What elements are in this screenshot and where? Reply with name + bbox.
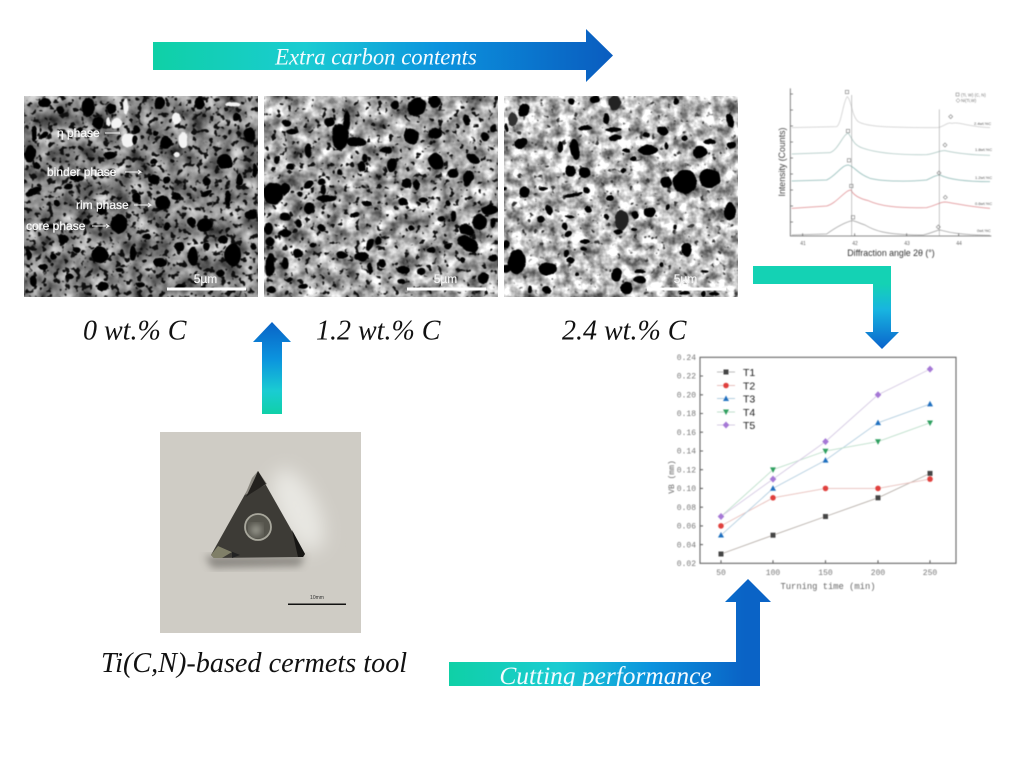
- x-axis tick labels: 250: [923, 569, 937, 578]
- chart legend: [717, 367, 755, 432]
- y-axis tick labels: 0.02: [677, 560, 696, 569]
- y-axis title: VB (mm): [668, 460, 677, 494]
- chart: XRD patterns: [777, 88, 992, 258]
- insert body: [211, 471, 305, 558]
- XRD tick labels: [800, 241, 962, 247]
- XRD peak guide lines: [852, 95, 939, 236]
- XRD curve 1.8 wt.% C: [792, 133, 990, 155]
- x-axis tick labels: [716, 569, 937, 578]
- x-axis title: Turning time (min): [780, 582, 876, 592]
- scale bar 5 µm: [407, 272, 486, 290]
- XRD axis title: intensity: Intensity (Counts): [777, 127, 787, 196]
- y-axis tick labels: 0.14: [677, 448, 696, 457]
- micrograph labels: binder phase: [47, 165, 117, 179]
- arrow: extra carbon contents: Extra carbon contents: [274, 44, 477, 70]
- XRD peak markers: [845, 90, 953, 229]
- micrograph labels: core phase: [26, 219, 86, 233]
- arrow: cutting performance: Cutting performance: [499, 662, 712, 690]
- XRD curve labels: 0.6wt.%C: [975, 201, 992, 206]
- x-axis tick labels: 150: [818, 569, 833, 578]
- scale bar 5 µm: 5µm: [434, 272, 457, 286]
- XRD curve 0.6 wt.% C: [792, 190, 990, 208]
- XRD axes frame: [790, 88, 991, 236]
- panel: micrograph 2.4 wt.% C: [502, 95, 738, 297]
- XRD curve labels: 1.2wt.%C: [975, 175, 992, 180]
- caption: 2.4 wt.% C: 2.4 wt.% C: [562, 316, 687, 346]
- chart legend: T4: [743, 407, 755, 419]
- XRD axis title: diffraction angle: Diffraction angle 2θ (°): [847, 248, 935, 258]
- chart legend: T1: [743, 367, 755, 379]
- series T1: [718, 471, 932, 556]
- x-axis tick labels: 200: [871, 569, 885, 578]
- arrow: cutting performance: [449, 579, 771, 690]
- micrograph labels: rim phase: [76, 198, 129, 212]
- insert hole: [245, 514, 271, 540]
- XRD tick labels: 43: [904, 241, 910, 247]
- XRD legend: (Ti, W) (C, N): [961, 92, 986, 98]
- XRD curve 2.4 wt.% C: [792, 97, 990, 128]
- insert shadow: [205, 556, 305, 568]
- photo scale bar 10 mm: [288, 595, 346, 605]
- series T5: [718, 366, 933, 520]
- photo scale bar 10 mm: 10mm: [310, 595, 324, 601]
- XRD tick labels: 42: [852, 241, 858, 247]
- chart frame and ticks: [700, 357, 956, 563]
- XRD curve 0 wt.% C: [792, 221, 990, 235]
- scale bar 5 µm: [647, 272, 726, 290]
- chart legend: T3: [743, 394, 755, 406]
- y-axis tick labels: 0.08: [677, 504, 696, 513]
- x-axis tick labels: 100: [766, 569, 780, 578]
- y-axis tick labels: 0.22: [677, 373, 696, 382]
- scale bar 5 µm: 5µm: [674, 272, 697, 286]
- XRD tick labels: 44: [956, 241, 962, 247]
- chart legend: T2: [743, 380, 755, 392]
- x-axis tick labels: 50: [716, 569, 726, 578]
- XRD curve labels: [974, 121, 992, 233]
- caption: 0 wt.% C: 0 wt.% C: [83, 316, 187, 346]
- y-axis tick labels: 0.06: [677, 523, 696, 532]
- caption: 1.2 wt.% C: 1.2 wt.% C: [316, 316, 441, 346]
- XRD curve labels: 2.4wt.%C: [974, 121, 991, 126]
- arrow: extra carbon contents: [153, 29, 613, 82]
- series T3: [718, 401, 933, 538]
- micrograph labels: η phase: [57, 126, 100, 140]
- caption: Ti(C,N)-based cermets tool: Ti(C,N)-based cermets tool: [101, 648, 407, 679]
- panel: micrograph 1.2 wt.% C: [263, 95, 498, 297]
- y-axis tick labels: 0.20: [677, 392, 696, 400]
- XRD curve labels: 1.8wt.%C: [975, 147, 992, 152]
- arrow: tool to micrographs: [253, 322, 291, 414]
- arrow: XRD to cutting chart: [753, 266, 899, 349]
- y-axis tick labels: 0.10: [677, 485, 696, 494]
- series T4: [721, 420, 933, 516]
- XRD legend: Ni(Ti,W): [961, 98, 977, 103]
- series T2: [718, 476, 933, 529]
- y-axis tick labels: 0.24: [677, 354, 696, 363]
- XRD curve labels: 0wt.%C: [977, 228, 991, 233]
- photo highlight: [261, 462, 335, 558]
- y-axis tick labels: 0.18: [677, 410, 696, 419]
- photo: cermet tool insert: [160, 432, 361, 633]
- chart legend: T5: [743, 420, 755, 432]
- XRD curve 1.2 wt.% C: [792, 165, 990, 182]
- chart: VB wear vs turning time: [668, 354, 956, 592]
- scale bar 5 µm: 5µm: [194, 272, 217, 286]
- scale bar 5 µm: [167, 272, 246, 290]
- panel: micrograph 0 wt.% C: [24, 96, 258, 297]
- y-axis tick labels: 0.12: [677, 466, 696, 475]
- micrograph labels: [26, 126, 151, 233]
- y-axis tick labels: 0.04: [677, 541, 696, 550]
- y-axis tick labels: [677, 354, 696, 569]
- XRD tick labels: 41: [800, 241, 806, 247]
- y-axis tick labels: 0.16: [677, 429, 696, 438]
- XRD legend: [956, 92, 986, 103]
